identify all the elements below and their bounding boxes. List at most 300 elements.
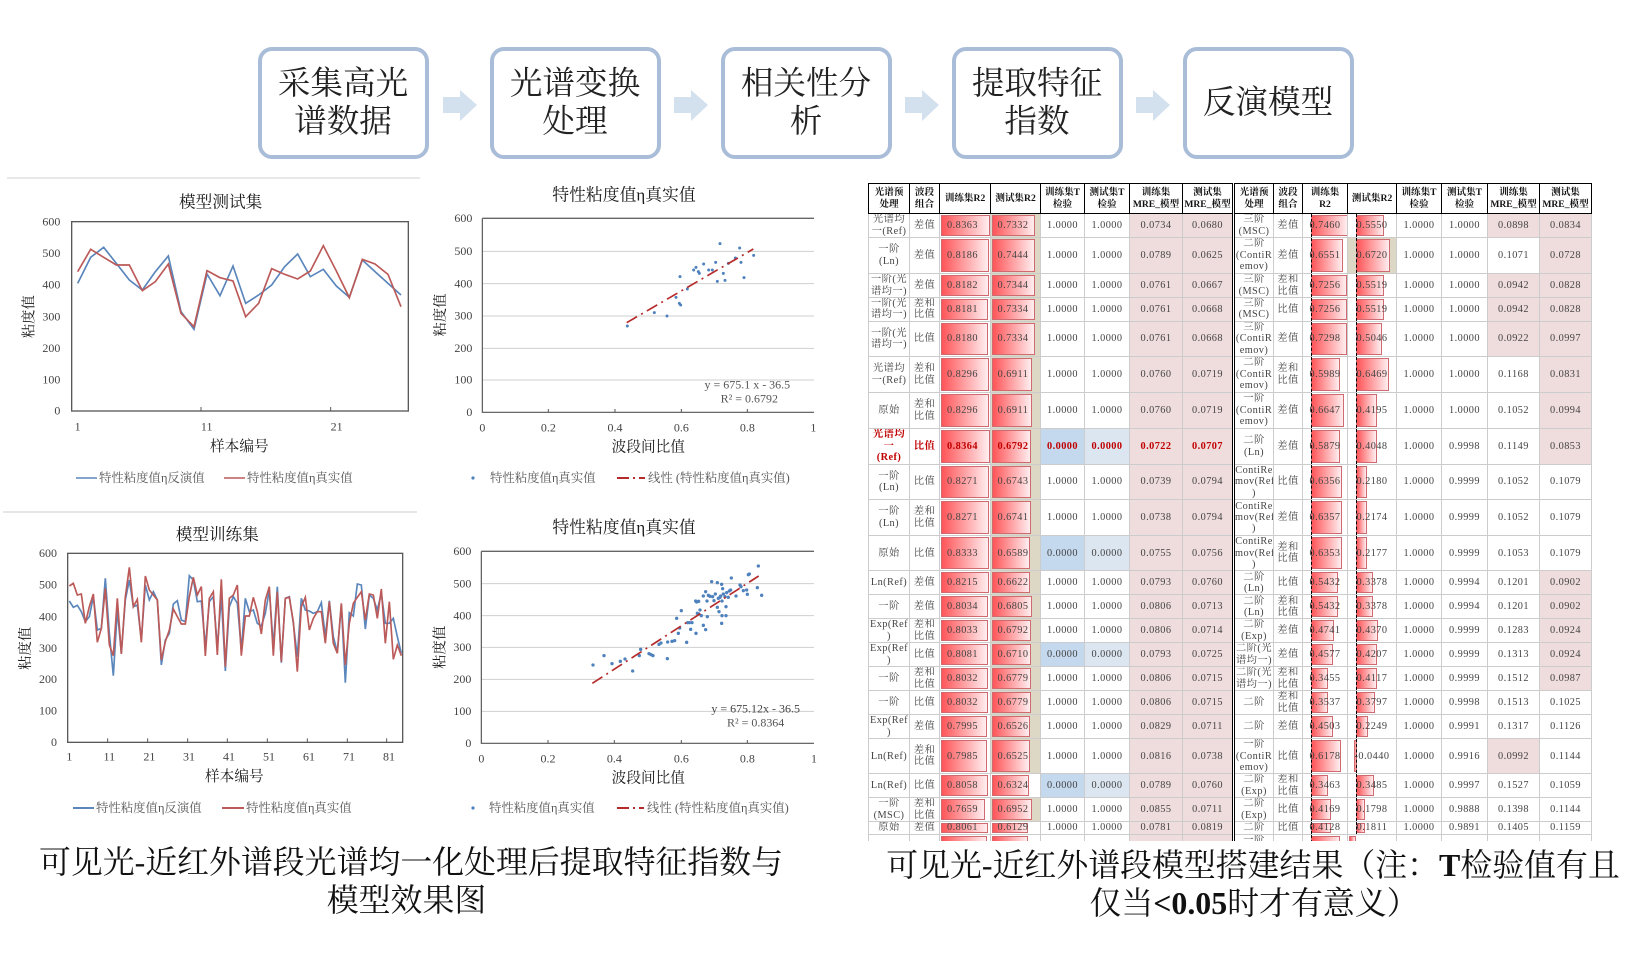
- legend: 散点图测试集: 线性 (特性粘度值η真实值): [648, 470, 790, 485]
- row 3: 1.0000: [1403, 280, 1435, 291]
- row 11: 0.0756: [1192, 548, 1223, 559]
- row 5: 三阶: [1243, 322, 1265, 333]
- row 3: 0.7256: [1309, 280, 1341, 291]
- x axis labels: 71: [343, 750, 355, 764]
- x axis labels: 11: [201, 420, 212, 434]
- row 12: Ln(Ref): [871, 577, 907, 588]
- row 17: 1.0000: [1091, 697, 1123, 708]
- row 17: 0.3797: [1356, 697, 1388, 708]
- row 13: 二阶: [1243, 596, 1265, 607]
- row 15: 0.1313: [1498, 649, 1529, 660]
- y axis labels: 300: [453, 640, 471, 654]
- table header: 训练集T: [1401, 187, 1437, 198]
- row 4: 1.0000: [1403, 304, 1435, 315]
- caption: 左侧: [39, 845, 783, 918]
- table header: 检验: [1409, 198, 1429, 210]
- row 4: 0.7256: [1309, 304, 1341, 315]
- chart title: 特性粘度值η真实值: [552, 518, 696, 537]
- row 21: 1.0000: [1047, 804, 1078, 815]
- row 12: 0.1201: [1498, 577, 1529, 588]
- x axis title: 波段间比值: [612, 438, 685, 456]
- row 4: 比值: [914, 309, 935, 320]
- row 1: 0.0680: [1192, 220, 1223, 231]
- row 21: 一阶: [878, 798, 900, 809]
- row 7: 差和: [914, 399, 935, 410]
- row 20: 0.0000: [1047, 780, 1078, 791]
- row 17: 比值: [1277, 703, 1299, 714]
- row 17: 0.1025: [1550, 697, 1581, 708]
- row 15: 0.0725: [1192, 649, 1223, 660]
- row 11: ContiRe: [1235, 536, 1273, 547]
- y axis labels: [454, 211, 472, 419]
- row 15: 0.4207: [1356, 649, 1388, 660]
- table header: 测试集: [1551, 187, 1580, 198]
- row 10: 0.1052: [1498, 512, 1529, 523]
- y axis labels: 100: [39, 704, 57, 718]
- row 16: 差和: [914, 667, 935, 678]
- row 10: 0.8271: [947, 512, 978, 523]
- row 2: 0.0728: [1550, 250, 1581, 261]
- row 14: 0.0924: [1550, 625, 1581, 636]
- row 19: 0.7985: [947, 750, 978, 762]
- row 10: 一阶: [878, 506, 900, 517]
- row 1: 1.0000: [1449, 220, 1480, 231]
- y axis labels: 600: [42, 214, 60, 228]
- row 13: 差值: [914, 601, 935, 612]
- row 17: 差和: [1277, 691, 1299, 702]
- row 1: 0.5550: [1356, 220, 1388, 231]
- row 8: highlighted best model: 0.5879: [1309, 441, 1341, 452]
- table header: 训练集: [1311, 187, 1339, 198]
- x axis labels: 1: [810, 420, 816, 434]
- row 10: 0.0738: [1140, 512, 1172, 523]
- y axis labels: 600: [453, 544, 471, 558]
- table header: 检验: [1097, 198, 1117, 210]
- row 2: 1.0000: [1047, 250, 1078, 261]
- row 18: 0.9991: [1449, 721, 1480, 732]
- row 1: 0.0734: [1140, 220, 1172, 231]
- row 8: highlighted best model: 0.1149: [1498, 441, 1529, 452]
- row 3: 0.0828: [1550, 280, 1581, 291]
- y axis labels: 100: [42, 373, 60, 387]
- row 16: 0.3455: [1309, 673, 1341, 684]
- row 20: 0.8058: [947, 780, 978, 791]
- x axis labels: 0.4: [607, 751, 622, 765]
- row 4: 0.7334: [997, 304, 1029, 315]
- row 13: 0.6805: [997, 601, 1029, 612]
- row 11: 0.0755: [1140, 548, 1172, 559]
- x axis labels: 0: [479, 420, 485, 434]
- chart title: 特性粘度值η真实值: [552, 186, 696, 205]
- row 21: 1.0000: [1091, 804, 1123, 815]
- row 14: ): [887, 631, 891, 642]
- row 2: 0.8186: [947, 250, 978, 261]
- row 17: 0.8032: [947, 697, 978, 708]
- row 12: 差值: [914, 577, 935, 588]
- row 6: 差和: [914, 363, 935, 374]
- row 13: 0.9994: [1449, 601, 1480, 612]
- row 5: 0.5046: [1356, 333, 1388, 344]
- row 20: 0.3485: [1356, 780, 1388, 791]
- row 15: 谱均一): [1236, 655, 1272, 666]
- row 17: 比值: [914, 697, 935, 708]
- row 22: 0.0819: [1192, 822, 1223, 833]
- row 10: 差和: [914, 506, 935, 517]
- row 4: 0.0668: [1192, 304, 1223, 315]
- row 8: highlighted best model: 比值: [914, 441, 935, 452]
- row 8: highlighted best model: (Ref): [877, 452, 901, 463]
- row 8: highlighted best model: 0.0722: [1140, 441, 1172, 452]
- row 1: 1.0000: [1047, 220, 1078, 231]
- y axis labels: 100: [453, 704, 471, 718]
- line chart: 模型测试集: [19, 192, 408, 455]
- row 4: 1.0000: [1449, 304, 1480, 315]
- table header: 训练集: [1499, 187, 1528, 198]
- row 6: (ContiR: [1236, 369, 1272, 380]
- results table: [868, 183, 1592, 841]
- row 3: 三阶: [1243, 274, 1265, 285]
- x axis labels: 51: [263, 750, 275, 764]
- row 2: 1.0000: [1091, 250, 1123, 261]
- row 7: 0.0719: [1192, 405, 1223, 416]
- table header: 测试集: [1193, 187, 1222, 198]
- scatter chart: 训练集: [430, 518, 817, 786]
- row 14: [870, 619, 1591, 642]
- row 14: 差和: [914, 619, 935, 630]
- row 14: 1.0000: [1403, 625, 1435, 636]
- row 18: 二阶: [1243, 721, 1265, 732]
- row 16: 0.4117: [1357, 673, 1387, 684]
- row 8: highlighted best model: 0.9998: [1449, 441, 1480, 452]
- regression equation: y = 675.1 x - 36.5: [705, 378, 790, 392]
- row 14: 0.0806: [1140, 625, 1172, 636]
- row 11: 比值: [1277, 553, 1299, 564]
- row 5: 0.0997: [1550, 333, 1581, 344]
- row 9: (Ln): [879, 482, 899, 493]
- row 11: 差和: [1277, 542, 1299, 553]
- row 20: Ln(Ref): [871, 780, 907, 791]
- table header: R2: [1319, 198, 1331, 210]
- row 22: 二阶: [1243, 822, 1265, 833]
- row 3: 1.0000: [1047, 280, 1078, 291]
- y axis labels: 200: [39, 672, 57, 686]
- row 8: highlighted best model: 0.0000: [1091, 441, 1123, 452]
- row 8: highlighted best model: 一: [884, 441, 894, 452]
- row 12: (Ln): [1244, 583, 1264, 594]
- row 21: 0.1798: [1356, 804, 1388, 815]
- row 1: 1.0000: [1091, 220, 1123, 231]
- row 6: 光谱均: [873, 363, 905, 374]
- legend: 模型测试集: 特性粘度值η反演值: [99, 470, 205, 485]
- row 12: 0.0902: [1550, 577, 1581, 588]
- row 4: 比值: [1277, 304, 1299, 315]
- row 18: 1.0000: [1091, 721, 1123, 732]
- row 17: 一阶: [878, 697, 900, 708]
- row 15: 0.0000: [1091, 649, 1123, 660]
- y axis labels: 0: [51, 735, 57, 749]
- table header: MRE_模型: [1133, 198, 1179, 210]
- row 12: 0.8215: [947, 577, 978, 588]
- row 20: 0.0000: [1091, 780, 1123, 791]
- x axis title: 样本编号: [210, 438, 269, 455]
- row 4: [871, 298, 1591, 321]
- table header: 训练集T: [1045, 187, 1080, 198]
- row 21: 0.0855: [1140, 804, 1172, 815]
- x axis labels: 41: [223, 750, 235, 764]
- table header: 组合: [1278, 198, 1298, 210]
- legend: 散点图测试集: 特性粘度值η真实值: [490, 470, 596, 485]
- row 1: 0.8363: [947, 220, 978, 231]
- caption: 左侧: 模型效果图: [327, 883, 486, 918]
- row 14: 1.0000: [1047, 625, 1078, 636]
- y axis title: 粘度值: [431, 293, 449, 336]
- row 19: 1.0000: [1403, 750, 1435, 762]
- row 7: 0.6647: [1309, 405, 1341, 416]
- row 17: 1.0000: [1047, 697, 1078, 708]
- row 22: 0.8061: [947, 822, 978, 833]
- x axis labels: 61: [303, 750, 315, 764]
- row 2: 0.6720: [1356, 250, 1388, 261]
- row 20: 0.0789: [1140, 780, 1172, 791]
- row 2: 二阶: [1243, 238, 1265, 249]
- row 11: 1.0000: [1403, 548, 1435, 559]
- row 13: 1.0000: [1047, 601, 1078, 612]
- row 1: [872, 214, 1591, 237]
- row 10: 0.1079: [1550, 512, 1581, 523]
- trend line: [627, 249, 753, 323]
- row 5: 0.8180: [947, 333, 978, 344]
- legend: 散点图训练集: [471, 800, 789, 815]
- row 18: 1.0000: [1047, 721, 1078, 732]
- row 7: 原始: [878, 405, 900, 416]
- row 14: 差值: [1277, 625, 1299, 636]
- table header: 训练集R2: [945, 193, 985, 204]
- row 12: 0.6622: [997, 577, 1029, 588]
- table header: 波段: [915, 187, 934, 198]
- row 18: 0.1317: [1498, 721, 1529, 732]
- row 19: Ln(Ref): [871, 750, 907, 762]
- table header: MRE_模型: [1542, 198, 1589, 210]
- row 13: 比值: [1277, 607, 1299, 618]
- row 14: Exp(Ref: [870, 619, 908, 630]
- row 6: 比值: [914, 375, 935, 386]
- row 6: 比值: [1277, 375, 1299, 386]
- data points: [591, 564, 763, 673]
- row 21: 0.6952: [997, 804, 1029, 815]
- series: 真实值: [69, 567, 401, 672]
- row 9: 比值: [914, 476, 935, 487]
- row 21: 差和: [914, 798, 935, 809]
- trend line: [592, 576, 759, 683]
- x axis labels: 21: [143, 750, 155, 764]
- row 5: 1.0000: [1403, 333, 1435, 344]
- row 3: (MSC): [1239, 286, 1269, 296]
- row 3: 0.0667: [1192, 280, 1223, 291]
- row 10: 0.0794: [1192, 512, 1223, 523]
- row 6: 0.8296: [947, 369, 978, 380]
- table header: 波段: [1278, 187, 1298, 198]
- row 1: 0.7460: [1309, 220, 1341, 231]
- row 21: 比值: [914, 810, 935, 821]
- row 17: 0.0715: [1192, 697, 1223, 708]
- row 2: 差值: [1277, 250, 1299, 261]
- x axis labels: 0.2: [541, 420, 556, 434]
- row 15: 0.0000: [1047, 649, 1078, 660]
- row 7: 1.0000: [1449, 405, 1480, 416]
- series: 真实值: [78, 246, 401, 327]
- row 11: 0.6353: [1309, 548, 1341, 559]
- table header: 检验: [1053, 198, 1072, 210]
- row 6: 0.5989: [1309, 369, 1341, 380]
- row 14: 二阶: [1243, 619, 1265, 630]
- row 16: 1.0000: [1403, 673, 1435, 684]
- legend: 模型训练集: 特性粘度值η反演值: [96, 800, 202, 815]
- row 19: 比值: [1277, 750, 1299, 762]
- flow box: 提取特征指数: [954, 49, 1121, 157]
- row 22: 1.0000: [1091, 822, 1123, 833]
- row 8: highlighted best model: 0.0000: [1047, 441, 1078, 452]
- y axis labels: 100: [454, 373, 472, 387]
- row 3: 0.8182: [947, 280, 978, 291]
- row 14: 0.0714: [1192, 625, 1223, 636]
- row 16: 0.9999: [1449, 673, 1480, 684]
- row 1: 0.7332: [997, 220, 1029, 231]
- row 17: [878, 691, 1581, 714]
- row 15: 1.0000: [1403, 649, 1435, 660]
- row 19: [871, 739, 1581, 773]
- row 12: 0.0760: [1192, 577, 1223, 588]
- scatter chart: 测试集: [431, 186, 816, 456]
- row 4: 1.0000: [1047, 304, 1078, 315]
- row 6: 一(Ref): [872, 375, 906, 386]
- row 21: 0.1144: [1550, 804, 1581, 815]
- row 10: ): [1252, 523, 1256, 534]
- row 17: 二阶: [1243, 697, 1265, 708]
- row 1: 三阶: [1243, 214, 1265, 225]
- row 2: (Ln): [879, 256, 899, 266]
- row 9: 0.1052: [1498, 476, 1529, 487]
- caption: 右侧: 可见光-近红外谱段模型搭建结果（注：T检验值有且: [886, 848, 1620, 883]
- row 22: 0.1811: [1357, 822, 1387, 833]
- legend: 模型测试集: [76, 470, 353, 485]
- row 8: highlighted best model: 0.6792: [997, 441, 1029, 452]
- y axis labels: 500: [39, 578, 57, 592]
- table header: 光谱预: [1240, 187, 1268, 198]
- row 12: 0.9994: [1449, 577, 1480, 588]
- row 16: 比值: [914, 679, 935, 690]
- y axis labels: 600: [454, 211, 472, 225]
- row 13: 0.8034: [947, 601, 978, 612]
- row 21: 二阶: [1243, 798, 1265, 809]
- row 15: 0.4577: [1309, 649, 1341, 660]
- row 15: 0.0924: [1550, 649, 1581, 660]
- row 11: 0.0000: [1047, 548, 1078, 559]
- row 3: 1.0000: [1091, 280, 1123, 291]
- row 5: 差值: [1277, 333, 1299, 344]
- row 22: 1.0000: [1047, 822, 1078, 833]
- row 4: 0.8181: [947, 304, 978, 315]
- x axis labels: 1: [811, 751, 817, 765]
- row 23: clipped: [941, 835, 1356, 841]
- row 5: emov): [1240, 345, 1268, 356]
- row 10: 0.6357: [1309, 512, 1341, 523]
- row 18: 0.6526: [997, 721, 1029, 732]
- row 20: 0.1527: [1498, 780, 1529, 791]
- arrow: [905, 90, 939, 121]
- flow box: 光谱变换处理: [492, 49, 659, 157]
- row 10: 1.0000: [1403, 512, 1435, 523]
- row 3: [871, 274, 1591, 297]
- row 16: 0.0715: [1192, 673, 1223, 684]
- row 1: 光谱均: [873, 214, 905, 225]
- row 1: 差值: [1277, 220, 1299, 231]
- row 3: 0.7344: [997, 280, 1029, 291]
- row 15: 0.0793: [1140, 649, 1172, 660]
- row 5: 0.0761: [1140, 333, 1172, 344]
- row 4: 1.0000: [1091, 304, 1123, 315]
- row 21: (MSC): [874, 810, 904, 821]
- row 4: 0.0761: [1140, 304, 1172, 315]
- row 16: 差和: [1277, 667, 1299, 678]
- row 9: 1.0000: [1047, 476, 1078, 487]
- row 5: 1.0000: [1091, 333, 1123, 344]
- row 12: 0.3378: [1356, 577, 1388, 588]
- row 7: 0.1052: [1498, 405, 1529, 416]
- x axis labels: 0.8: [740, 751, 755, 765]
- row 7: 一阶: [1243, 393, 1265, 404]
- line chart: 模型训练集: [16, 525, 403, 785]
- row 19: 差和: [914, 745, 935, 756]
- row 20: 差和: [1277, 774, 1299, 785]
- y axis labels: 500: [453, 576, 471, 590]
- y axis labels: 500: [454, 244, 472, 258]
- row 11: 0.8333: [947, 548, 978, 559]
- row 16: 1.0000: [1091, 673, 1123, 684]
- legend: 模型测试集: 特性粘度值η真实值: [247, 470, 353, 485]
- x axis labels: 1: [66, 750, 72, 764]
- row 9: 0.2180: [1356, 476, 1388, 487]
- arrow: [1136, 90, 1170, 121]
- row 7: (ContiR: [1236, 405, 1272, 416]
- row 9: 0.0739: [1140, 476, 1172, 487]
- row 8: highlighted best model: [873, 429, 1591, 464]
- row 6: 0.1168: [1498, 369, 1529, 380]
- row 5: (ContiR: [1236, 333, 1272, 344]
- row 8: highlighted best model: (Ln): [1244, 447, 1264, 458]
- row 6: 二阶: [1243, 357, 1265, 368]
- row 9: 0.6743: [997, 476, 1029, 487]
- row 15: 比值: [914, 649, 935, 660]
- row 8: highlighted best model: 0.0707: [1192, 441, 1223, 452]
- y axis labels: 400: [453, 608, 471, 622]
- row 13: 差和: [1277, 596, 1299, 607]
- row 7: [878, 393, 1591, 428]
- x axis title: 波段间比值: [612, 768, 685, 786]
- row 22: [878, 822, 1581, 834]
- y axis labels: 200: [42, 341, 60, 355]
- row 11: 0.0000: [1091, 548, 1123, 559]
- row 18: 0.0711: [1192, 721, 1223, 732]
- arrow: [443, 90, 477, 121]
- row 1: 差值: [914, 220, 935, 231]
- row 10: 1.0000: [1091, 512, 1123, 523]
- row 9: 0.8271: [947, 476, 978, 487]
- series: 反演值: [69, 576, 401, 683]
- row 15: 0.6710: [997, 649, 1029, 660]
- table header: 组合: [915, 198, 934, 210]
- row 4: 0.5519: [1356, 304, 1388, 315]
- row 13: 0.5432: [1309, 601, 1341, 612]
